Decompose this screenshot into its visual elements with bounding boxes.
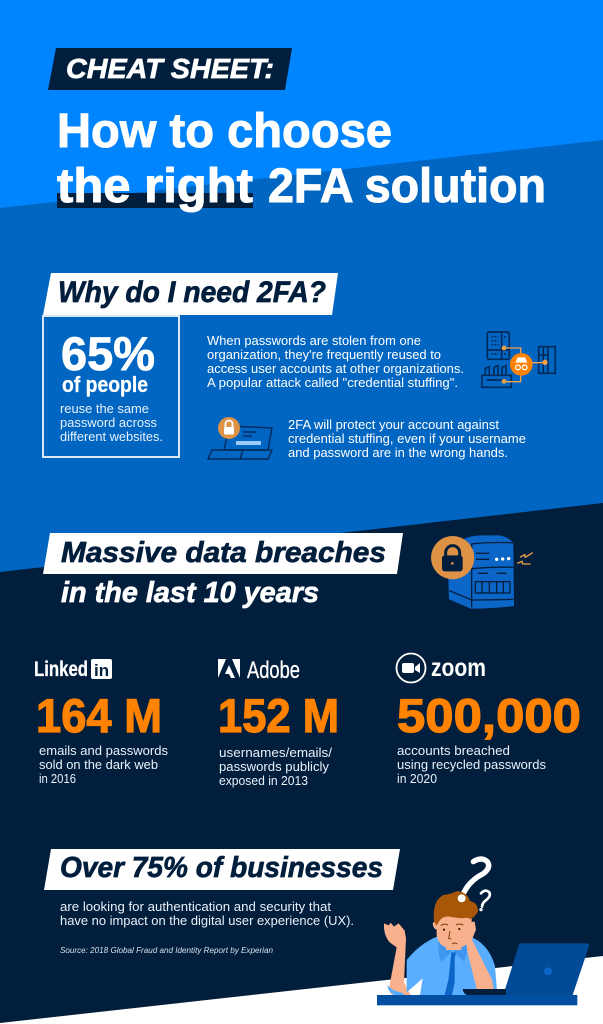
stat: Zoom 500,000: in 2020 bbox=[397, 772, 437, 786]
source note: Source: 2018 Global Fraud and Identity Report by Experian bbox=[60, 946, 274, 955]
text: 2FA protection: 2FA will protect your account against bbox=[288, 418, 500, 432]
text: 2FA protection: and password are in the wrong hands. bbox=[288, 446, 508, 460]
stat: Zoom 500,000 bbox=[397, 689, 581, 786]
stat: Adobe 152 M: 152 M bbox=[218, 689, 339, 742]
hair bbox=[434, 891, 478, 925]
panel: 65% statistic: of people bbox=[62, 372, 148, 397]
stat: Adobe 152 M bbox=[218, 689, 339, 788]
arm left bbox=[384, 923, 411, 995]
icon: laptop with padlock bbox=[208, 417, 272, 459]
face bbox=[441, 924, 463, 944]
text: credential reuse: access user accounts at other organizations. bbox=[207, 362, 464, 376]
heading: why do I need 2FA: Why do I need 2FA? bbox=[58, 276, 326, 309]
illustration: confused person at laptop bbox=[377, 859, 589, 1005]
stat: Zoom 500,000: 500,000 bbox=[397, 689, 581, 742]
title: How to choose bbox=[57, 105, 392, 158]
logo: Adobe bbox=[218, 657, 300, 684]
text: UX expectations: have no impact on the digital user experience (UX). bbox=[60, 914, 354, 928]
arm right bbox=[466, 922, 494, 992]
text: UX expectations bbox=[60, 900, 354, 928]
panel: 65% statistic: different websites. bbox=[60, 430, 163, 444]
heading: massive data breaches: Massive data breaches bbox=[61, 537, 386, 569]
head bbox=[446, 935, 461, 950]
stat: Zoom 500,000: using recycled passwords bbox=[397, 758, 546, 772]
text: 2FA protection: credential stuffing, even if your username bbox=[288, 432, 526, 446]
laptop bbox=[503, 943, 589, 995]
text: 2FA protection bbox=[288, 418, 526, 460]
panel: 65% statistic bbox=[43, 316, 179, 457]
heading: over 75% of businesses: Over 75% of businesses bbox=[60, 852, 383, 884]
panel: 65% statistic: reuse the same bbox=[60, 402, 149, 416]
text: credential reuse: When passwords are stolen from one bbox=[207, 334, 421, 348]
icon: credential stuffing network bbox=[482, 332, 555, 387]
stat: Adobe 152 M: exposed in 2013 bbox=[219, 774, 308, 788]
stat: LinkedIn 164 M: emails and passwords bbox=[39, 744, 168, 758]
logo: Adobe: Adobe bbox=[247, 657, 300, 684]
logo: LinkedIn: Linked bbox=[34, 658, 88, 681]
title bbox=[57, 105, 546, 213]
heading: massive data breaches bbox=[43, 533, 403, 609]
text: credential reuse: organization, they're frequently reused to bbox=[207, 348, 441, 362]
panel: 65% statistic: password across bbox=[60, 416, 157, 430]
logo: LinkedIn: in bbox=[94, 661, 109, 680]
stat: LinkedIn 164 M: 164 M bbox=[36, 689, 162, 742]
title: 2FA solution bbox=[268, 160, 546, 213]
stat: Adobe 152 M: passwords publicly bbox=[219, 760, 330, 774]
question marks bbox=[464, 859, 490, 910]
stat: Adobe 152 M: usernames/emails/ bbox=[219, 746, 333, 760]
text: credential reuse: A popular attack called "credential stuffing". bbox=[207, 376, 458, 390]
cheat sheet label: CHEAT SHEET: bbox=[66, 53, 274, 84]
stat: LinkedIn 164 M bbox=[36, 689, 168, 786]
cheat sheet label bbox=[48, 48, 292, 90]
logo: Zoom bbox=[396, 654, 486, 682]
desk bbox=[377, 995, 577, 1005]
text: UX expectations: are looking for authentication and security that bbox=[60, 900, 332, 914]
stat: LinkedIn 164 M: sold on the dark web bbox=[39, 758, 158, 772]
panel: 65% statistic: 65% bbox=[61, 327, 155, 380]
shirt bbox=[407, 936, 497, 995]
logo: Zoom: zoom bbox=[431, 654, 486, 682]
text: credential reuse bbox=[207, 334, 464, 390]
stat: LinkedIn 164 M: in 2016 bbox=[39, 772, 76, 786]
icon: locked server bbox=[431, 535, 533, 609]
title: the right bbox=[57, 160, 253, 213]
stat: Zoom 500,000: accounts breached bbox=[397, 744, 510, 758]
heading: massive data breaches: in the last 10 years bbox=[61, 577, 319, 609]
